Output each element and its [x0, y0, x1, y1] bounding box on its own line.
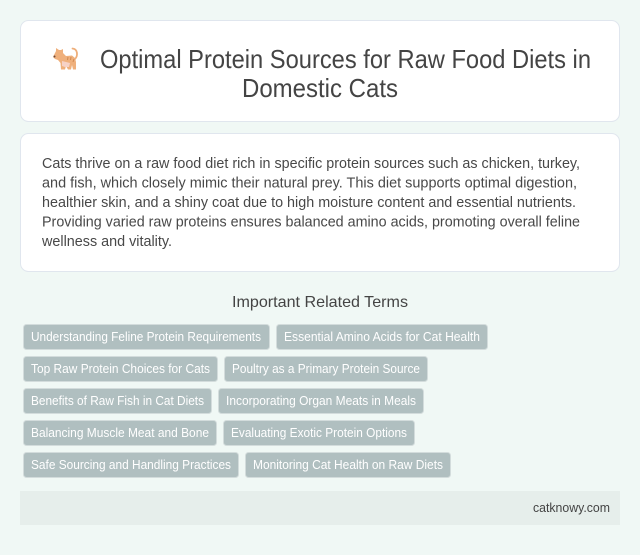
- text block: description: wellness and vitality.: [41, 234, 172, 250]
- tag: Benefits of Raw Fish in Cat Diets: [31, 394, 204, 408]
- tag: Evaluating Exotic Protein Options: [231, 426, 407, 440]
- tag: Safe Sourcing and Handling Practices: [31, 458, 231, 472]
- panel: description: [20, 134, 620, 272]
- footer: [20, 491, 620, 525]
- tag: Balancing Muscle Meat and Bone: [31, 426, 209, 440]
- tag list: [24, 324, 488, 478]
- tag: [24, 420, 216, 446]
- text block: description: healthier skin, and a shiny coat due to high moisture content and essential nutrients.: [42, 195, 576, 211]
- tag: Essential Amino Acids for Cat Health: [284, 330, 480, 344]
- heading: important related terms: Important Related Terms: [232, 294, 408, 311]
- tag: [24, 356, 218, 382]
- text block: description: Cats thrive on a raw food diet rich in specific protein sources such as chicken, turkey,: [42, 156, 580, 172]
- tag: Monitoring Cat Health on Raw Diets: [253, 458, 443, 472]
- tag: [224, 356, 428, 382]
- panel: title card: [20, 20, 620, 122]
- tag: [24, 388, 212, 414]
- tag: [224, 420, 414, 446]
- tag: Poultry as a Primary Protein Source: [232, 362, 420, 376]
- tag: Understanding Feline Protein Requirements: [31, 330, 261, 344]
- tag: [218, 388, 424, 414]
- tag: [246, 452, 450, 478]
- footer: catknowy.com: [533, 500, 610, 515]
- text block: description: Providing varied raw proteins ensures balanced amino acids, promoting overall feline: [42, 214, 580, 230]
- tag: [276, 324, 488, 350]
- text block: description: [41, 156, 580, 250]
- title: Optimal Protein Sources for Raw Food Diets in: [100, 46, 591, 74]
- tag: Incorporating Organ Meats in Meals: [226, 394, 416, 408]
- tag: [24, 324, 270, 350]
- icon: cat: [53, 48, 77, 70]
- title: [100, 46, 591, 103]
- text block: description: and fish, which closely mimic their natural prey. This diet supports optimal digestion,: [42, 176, 577, 192]
- title: Domestic Cats: [242, 75, 398, 103]
- tag: Top Raw Protein Choices for Cats: [31, 362, 210, 376]
- tag: [24, 452, 238, 478]
